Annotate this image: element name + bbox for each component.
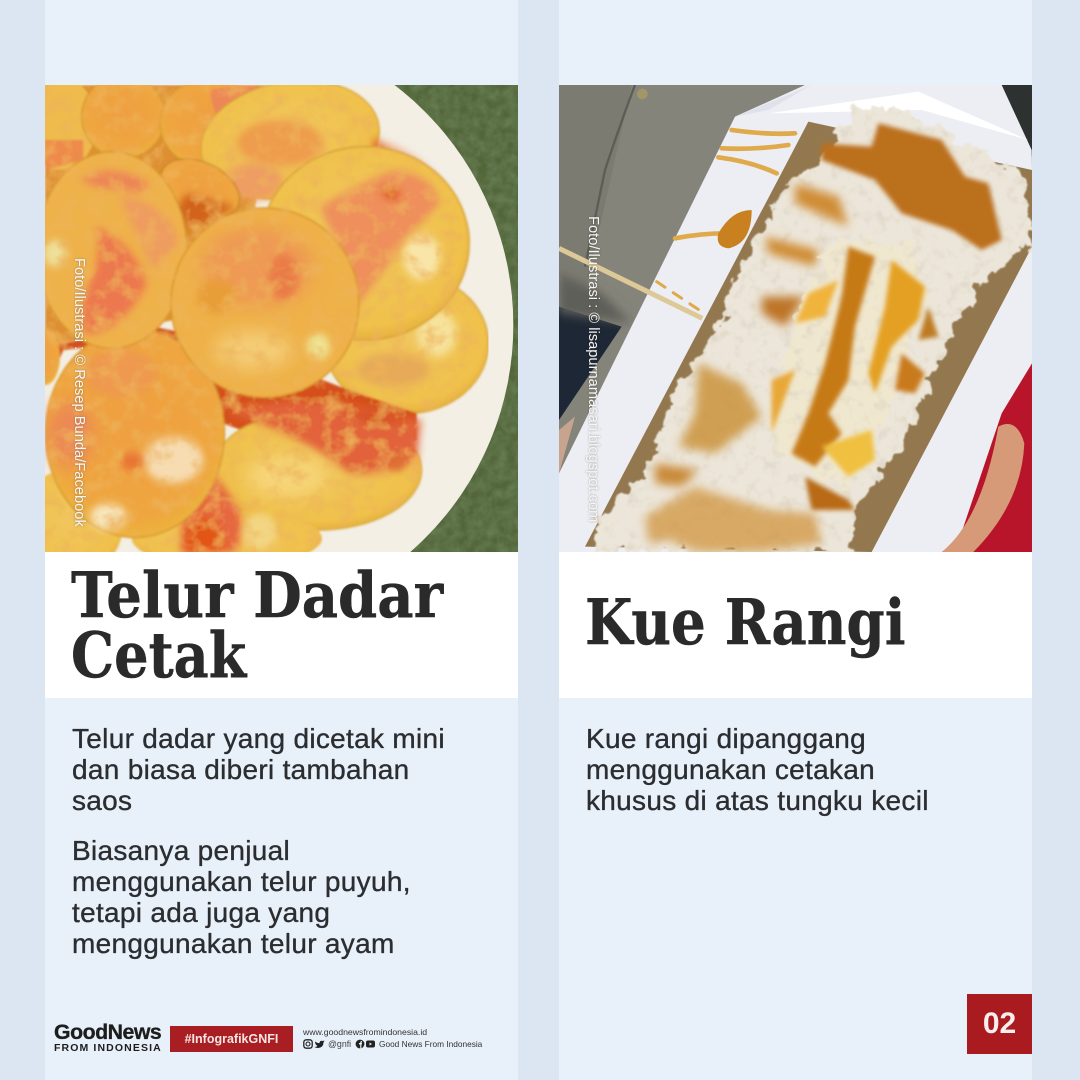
- far right omelette: [325, 273, 488, 413]
- text: telur dadar seller note: [72, 835, 411, 960]
- paper tray: [559, 85, 1032, 552]
- text: telur dadar seller note: menggunakan telur puyuh,: [72, 866, 411, 897]
- text: telur dadar description: dan biasa diberi tambahan: [72, 754, 410, 785]
- centre omelette: [171, 208, 359, 397]
- icon: social media: [303, 1039, 375, 1049]
- panel: telur dadar cetak: [45, 0, 518, 1080]
- footer: website and social handles: Good News From Indonesia: [379, 1039, 482, 1049]
- sauce under centre: [45, 327, 417, 453]
- page number badge: [967, 994, 1032, 1054]
- text: telur dadar seller note: menggunakan telur ayam: [72, 928, 395, 959]
- footer: hashtag badge: #InfografikGNFI: [185, 1032, 278, 1046]
- far omelettes: [45, 85, 280, 347]
- skewer: [559, 248, 702, 318]
- finger: [942, 424, 1024, 552]
- right omelette: [261, 147, 469, 340]
- caramel sauce: [822, 123, 1002, 250]
- footer: GoodNews from Indonesia logo: FROM INDONESIA: [54, 1042, 162, 1054]
- photo credit: right: Foto/Ilustrasi : © lisapurnamasari.blogspot.com: [585, 216, 601, 522]
- centre bottom omelette: [213, 410, 421, 530]
- heading: telur dadar cetak: Cetak: [71, 618, 246, 692]
- panel: kue rangi: [559, 0, 1032, 1080]
- bottom sauce: [678, 363, 762, 453]
- heading: telur dadar cetak: [71, 558, 444, 692]
- text: kue rangi description: Kue rangi dipanggang: [586, 723, 866, 754]
- photo: telur dadar cetak on a plate: [45, 85, 518, 552]
- footer: hashtag badge: [170, 1026, 293, 1052]
- photo credit: left: Foto/Ilustrasi : © Resep Bunda/Facebook: [71, 258, 87, 527]
- drips: [657, 130, 795, 312]
- heading: telur dadar cetak: Telur Dadar: [71, 558, 443, 632]
- footer: website and social handles: @gnfi: [328, 1039, 351, 1049]
- text: telur dadar description: [72, 723, 445, 816]
- text: kue rangi description: khusus di atas tungku kecil: [586, 785, 929, 816]
- lower left omelette: [30, 328, 60, 385]
- text: telur dadar description: saos: [72, 785, 132, 816]
- footer: GoodNews from Indonesia logo: GoodNews: [54, 1020, 161, 1044]
- text: kue rangi description: menggunakan cetakan: [586, 754, 875, 785]
- footer: website and social handles: [303, 1027, 482, 1049]
- footer: website and social handles: www.goodnewsfromindonesia.id: [303, 1027, 427, 1037]
- title band: telur dadar cetak: [45, 552, 518, 698]
- page number badge: 02: [983, 1007, 1016, 1040]
- bottom omelettes: [17, 470, 123, 577]
- rice: [595, 103, 1032, 552]
- text: telur dadar seller note: tetapi ada juga yang: [72, 897, 330, 928]
- text: telur dadar description: Telur dadar yang dicetak mini: [72, 723, 445, 754]
- red sleeve: [955, 363, 1032, 552]
- text: telur dadar seller note: Biasanya penjual: [72, 835, 290, 866]
- photo: kue rangi on a paper tray: [559, 85, 1032, 552]
- main rangi slice: [765, 240, 927, 493]
- cardboard liner: [585, 122, 1032, 552]
- heading: kue rangi: Kue Rangi: [585, 585, 905, 659]
- upper left omelette: [37, 152, 187, 348]
- text: kue rangi description: [586, 723, 929, 816]
- title band: kue rangi: [559, 552, 1032, 698]
